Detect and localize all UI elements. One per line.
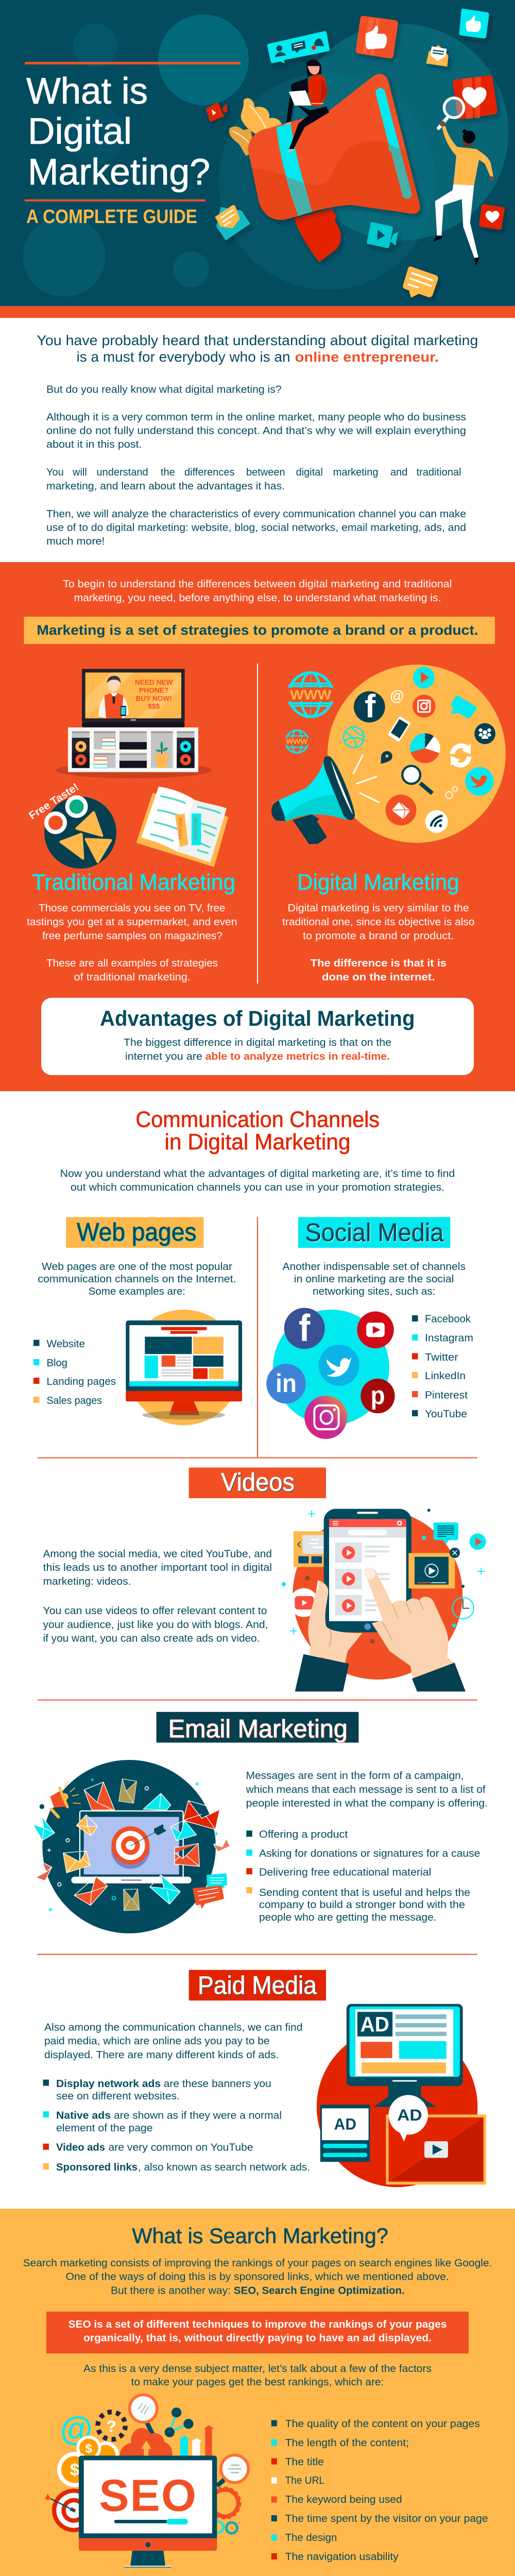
people icon (474, 723, 495, 744)
intro body text: digital (296, 467, 323, 478)
traditional marketing copy (27, 870, 237, 983)
question mark: ? (106, 2417, 116, 2435)
paid media list: Display network ads (56, 2078, 161, 2090)
illustration: digital megaphone and icons (271, 665, 506, 844)
youtube badge (289, 1588, 318, 1617)
phone (324, 1509, 411, 1632)
paid media text: Also among the communication channels, we can find (44, 2022, 302, 2033)
channels intro text (60, 1168, 455, 1193)
notification card (267, 31, 330, 63)
cloud (120, 2428, 173, 2456)
seo factors list: The navigation usability (285, 2551, 399, 2563)
seo factors list (271, 2418, 488, 2563)
gears (445, 787, 457, 799)
tv ad text: $$$ (148, 703, 160, 710)
envelope with note (215, 205, 250, 241)
videos text: Among the social media, we cited YouTube, and (43, 1549, 272, 1560)
web pages text: Web pages are one of the most popular (42, 1261, 232, 1273)
seo definition banner: organically, that is, without directly paying to have an ad displayed. (83, 2332, 432, 2344)
factors intro: to make your pages get the best rankings, which are: (131, 2377, 384, 2388)
channels intro text: out which communication channels you can use in your promotion strategies. (71, 1182, 444, 1193)
definition banner: Marketing is a set of strategies to promote a brand or a product. (37, 622, 478, 638)
social media text: in online marketing are the social (294, 1274, 454, 1285)
channels intro text: Now you understand what the advantages of digital marketing are, it’s time to find (60, 1168, 455, 1180)
www globe small: WWW (286, 738, 308, 745)
play icon (413, 667, 435, 688)
factors intro: As this is a very dense subject matter, let’s talk about a few of the factors (83, 2363, 432, 2375)
tv ad text (135, 679, 173, 710)
illustration: megaphone with people and social icons (206, 9, 508, 298)
seo factors list: The keyword being used (285, 2494, 402, 2505)
gears (210, 2487, 241, 2534)
title: A COMPLETE GUIDE (26, 206, 197, 228)
illustration: magazine with perfume samples: PERFUME (193, 817, 198, 839)
refresh icon (452, 746, 469, 765)
digital marketing copy (282, 870, 475, 983)
seo definition banner: SEO is a set of different techniques to improve the rankings of your pages (68, 2319, 447, 2330)
intro body text: use of to do digital marketing: website, blog, social networks, email marketing, ads, and (46, 522, 466, 534)
leaves (229, 98, 282, 156)
intro body text: online do not fully understand this concept. And that’s why we will explain everything (46, 426, 466, 437)
social media text: networking sites, such as: (313, 1286, 436, 1297)
social media list: Pinterest (425, 1390, 468, 1401)
email marketing list: Delivering free educational material (259, 1867, 431, 1878)
digital marketing copy: The difference is that it is (311, 958, 447, 969)
like card cyan (459, 9, 489, 39)
youtube (357, 1311, 394, 1348)
videos text: your audience, just like you do with blogs. And, (43, 1619, 268, 1631)
digital marketing copy: traditional one, since its objective is also (282, 917, 475, 928)
ad monitor (347, 2004, 463, 2107)
instagram icon (413, 694, 436, 718)
illustration: web page monitor (126, 1310, 242, 1425)
coins (57, 2436, 119, 2487)
instagram (304, 1396, 347, 1439)
intro body text (46, 384, 466, 547)
title: Digital (28, 111, 132, 152)
envelope icon (386, 794, 417, 825)
digital marketing copy: Digital Marketing (297, 870, 459, 895)
web pages heading: Web pages (77, 1218, 196, 1246)
cabinet (68, 727, 198, 772)
intro body text: will (72, 467, 87, 478)
digital marketing copy: to promote a brand or product. (303, 930, 454, 942)
intro lead text: is a must for everybody who is an (77, 349, 290, 365)
coins: $ (85, 2442, 92, 2456)
intro body text: between (246, 467, 285, 478)
title: What is (26, 71, 148, 112)
chat icon (434, 1522, 458, 1544)
title (25, 62, 241, 228)
email marketing list: Sending content that is useful and helps the (259, 1887, 470, 1899)
facebook icon: f (365, 689, 376, 725)
monitor: SEO (99, 2470, 196, 2520)
email marketing list: people who are getting the message. (259, 1912, 437, 1923)
illustration: tv commercial (56, 669, 212, 778)
intro body text: differences (184, 467, 234, 478)
email marketing list: company to build a stronger bond with the (259, 1900, 465, 1911)
at icon: @ (390, 688, 404, 704)
web pages list (33, 1338, 116, 1406)
linkedin: in (276, 1369, 297, 1398)
seo factors list: The time spent by the visitor on your page (285, 2513, 488, 2524)
paid media heading: Paid Media (198, 1972, 317, 1999)
illustration: email campaign (33, 1760, 230, 1934)
email marketing text: people interested in what the company is offering. (246, 1798, 488, 1809)
paid media list: , also known as search network ads. (138, 2162, 310, 2173)
social media list: Instagram (425, 1333, 473, 1344)
small heart card (479, 204, 505, 230)
paid media text (44, 2022, 302, 2061)
twitter (319, 1345, 359, 1386)
email marketing text: Messages are sent in the form of a campaign, (246, 1770, 464, 1782)
paid media list: Native ads (56, 2110, 111, 2122)
paid media list: are very common on YouTube (108, 2142, 253, 2153)
ad bubble: AD (397, 2107, 422, 2124)
tv ad text: PHONE? (139, 687, 168, 694)
definition intro text: To begin to understand the differences between digital marketing and traditional (63, 579, 452, 590)
paid media list: are these banners you (164, 2078, 271, 2090)
social media text (282, 1261, 466, 1297)
search marketing text: One of the ways of doing this is by sponsored links, which we mentioned above. (66, 2271, 449, 2282)
web pages list: Website (46, 1338, 85, 1350)
intro body text: marketing (333, 467, 379, 478)
video frame (408, 1548, 460, 1588)
paid media list (43, 2078, 310, 2173)
panel: advantages of digital marketing: Advantages of Digital Marketing (100, 1006, 415, 1030)
illustration: seo monitor (45, 2395, 248, 2567)
megaphone body (246, 74, 423, 223)
traditional marketing copy: of traditional marketing. (74, 972, 191, 983)
right magnifier (217, 2455, 248, 2486)
title: Marketing? (28, 152, 210, 193)
facebook (284, 1306, 325, 1349)
paid media list: see on different websites. (56, 2091, 180, 2102)
intro body text: You (46, 467, 64, 478)
envelope icon (426, 45, 449, 66)
search marketing text (23, 2258, 492, 2297)
email marketing list: Offering a product (259, 1829, 348, 1840)
social media list: YouTube (425, 1409, 467, 1420)
chat bubble icon (403, 266, 438, 298)
paid media list: element of the page (56, 2123, 153, 2134)
twitter icon (465, 767, 494, 795)
paid media text: paid media, which are online ads you pay to be (44, 2036, 270, 2047)
phone icon (388, 716, 411, 742)
video camera icon (367, 222, 398, 248)
illustration: free taste plate (27, 781, 116, 869)
intro lead text (37, 332, 478, 365)
panel: advantages of digital marketing: The biggest difference in digital marketing is that on the (124, 1037, 391, 1048)
digital marketing copy: done on the internet. (322, 972, 435, 983)
small megaphone (40, 1781, 81, 1817)
intro lead text: online entrepreneur. (295, 349, 439, 365)
paid media text: displayed. There are many different kinds of ads. (44, 2049, 279, 2061)
intro body text: and (390, 467, 407, 478)
laptop and target (71, 1811, 192, 1884)
envelopes behind laptop (84, 1779, 171, 1810)
top magnifier (130, 2395, 157, 2434)
target (45, 2488, 96, 2532)
web pages list: Blog (46, 1358, 67, 1369)
videos text: if you want, you can also create ads on video. (43, 1633, 260, 1645)
panel: search marketing (0, 2209, 515, 2576)
factors intro (83, 2363, 432, 2388)
small decorations (47, 1778, 218, 1912)
web pages list: Sales pages (46, 1395, 102, 1406)
email marketing list (246, 1829, 480, 1923)
heading: communication channels: Communication Channels (135, 1107, 380, 1132)
search marketing text: SEO, Search Engine Optimization. (234, 2285, 405, 2297)
digital marketing copy: Digital marketing is very similar to the (288, 903, 469, 914)
basketball icon (344, 727, 364, 748)
chat bubbles (193, 1873, 227, 1909)
panel: advantages of digital marketing: able to analyze metrics in real-time. (205, 1051, 390, 1062)
megaphone (271, 756, 355, 844)
location pin (381, 751, 392, 764)
envelopes (33, 1801, 230, 1910)
www globe large: WWW (290, 687, 332, 702)
tv ad text: BUY NOW! (135, 694, 172, 702)
intro body text: But do you really know what digital marketing is? (46, 384, 282, 396)
videos text: marketing: videos. (43, 1576, 131, 1587)
social media list: Twitter (425, 1352, 458, 1363)
at sign: @ (60, 2410, 93, 2447)
wifi icon (425, 810, 448, 833)
email marketing text: which means that each message is sent to a list of (246, 1784, 486, 1795)
like card (356, 16, 398, 58)
traditional marketing copy: Traditional Marketing (32, 870, 235, 895)
sound lines (353, 755, 379, 802)
email marketing list: Asking for donations or signatures for a cause (259, 1848, 480, 1859)
red camera icon (206, 102, 227, 122)
small decorations (282, 1509, 485, 1643)
intro body text: Although it is a very common term in the online market, many people who do business (46, 412, 466, 423)
seo factors list: The URL (285, 2475, 324, 2486)
www globe small (284, 730, 310, 753)
clock (453, 1598, 474, 1619)
www globe large (285, 673, 336, 717)
intro body text: marketing, and learn about the advantages it has. (46, 481, 285, 492)
megaphone handle (294, 209, 341, 262)
definition banner (24, 617, 495, 644)
social media list (412, 1314, 473, 1420)
growth arrows (179, 2425, 214, 2456)
social media list: Facebook (425, 1314, 471, 1325)
ad card: AD (334, 2115, 356, 2133)
paid media list: Sponsored links (56, 2162, 138, 2173)
illustration: magazine with perfume samples (136, 787, 228, 867)
coins: $ (70, 2461, 80, 2480)
linkedin (266, 1364, 306, 1403)
sample labels: PERFUME (178, 817, 183, 839)
panel: marketing definition (0, 562, 515, 1091)
magnifier icon (402, 766, 432, 793)
paid media list: Video ads (56, 2142, 105, 2153)
video ad (387, 2116, 485, 2183)
traditional marketing copy: Those commercials you see on TV, free (39, 903, 226, 914)
ad monitor: AD (360, 2013, 389, 2036)
intro body text: the (161, 467, 175, 478)
search marketing heading: What is Search Marketing? (132, 2224, 388, 2248)
illustration: paid ads (317, 2004, 485, 2187)
seo factors list: The length of the content; (285, 2437, 409, 2449)
hands (295, 1568, 466, 1691)
heading: communication channels (135, 1107, 380, 1155)
videos heading: Videos (221, 1468, 295, 1496)
intro body text: about it in this post. (46, 439, 142, 450)
play icon (470, 1533, 486, 1550)
social media text: Another indispensable set of channels (282, 1261, 466, 1273)
search marketing text: But there is another way: (111, 2285, 231, 2297)
social media list: LinkedIn (425, 1370, 466, 1382)
intro lead text: You have probably heard that understanding about digital marketing (37, 332, 478, 348)
seo factors list: The design (285, 2532, 337, 2544)
ad card (320, 2105, 370, 2162)
pinterest (360, 1379, 395, 1413)
intro body text: understand (97, 467, 148, 478)
question mark (98, 2412, 125, 2439)
email marketing heading: Email Marketing (168, 1715, 348, 1743)
intro body text: much more! (46, 536, 105, 547)
seo factors list: The quality of the content on your pages (285, 2418, 480, 2430)
traditional marketing copy: tastings you get at a supermarket, and even (27, 917, 237, 928)
panel: advantages of digital marketing (41, 998, 474, 1075)
definition intro text: marketing, you need, before anything else, to understand what marketing is. (74, 592, 441, 604)
traditional marketing copy: free perfume samples on magazines? (42, 930, 222, 942)
search marketing text: Search marketing consists of improving the rankings of your pages on search engines like Google. (23, 2258, 492, 2269)
heart card (453, 75, 497, 119)
facebook icon (354, 689, 385, 725)
videos heading (189, 1467, 326, 1498)
definition intro text (63, 579, 452, 604)
intro body text: traditional (417, 467, 461, 478)
heading: communication channels: in Digital Marketing (165, 1129, 350, 1155)
facebook: f (299, 1306, 311, 1349)
chat icon (451, 696, 476, 719)
tv ad text: NEED NEW (135, 679, 173, 686)
videos text: this leads us to another important tool in digital (43, 1562, 272, 1573)
panel: advantages of digital marketing: internet you are (125, 1051, 202, 1062)
decorative card left (294, 1531, 324, 1567)
web pages text: Some examples are: (89, 1286, 185, 1297)
traditional marketing copy: These are all examples of strategies (46, 958, 218, 969)
pie chart (410, 733, 440, 763)
pinterest: p (370, 1381, 385, 1410)
label: free taste: Free Taste! (27, 781, 81, 822)
web pages text: communication channels on the Internet. (38, 1274, 236, 1285)
ad bubble (389, 2095, 428, 2142)
man with magnifier (433, 98, 494, 266)
seo factors list: The title (285, 2456, 324, 2468)
videos text: You can use videos to offer relevant content to (43, 1605, 267, 1617)
presenter (99, 675, 129, 718)
seo definition banner (46, 2312, 469, 2353)
monitor (79, 2455, 217, 2567)
email marketing text (246, 1770, 488, 1809)
web pages list: Landing pages (46, 1376, 116, 1387)
woman with laptop (283, 60, 329, 152)
hero banner (0, 0, 515, 318)
videos text (43, 1549, 272, 1645)
illustration: phone with video app (282, 1509, 486, 1691)
network nodes (165, 2408, 194, 2437)
web pages text (38, 1261, 236, 1297)
intro body text: Then, we will analyze the characteristics of every communication channel you can make (46, 509, 466, 520)
social media heading: Social Media (305, 1219, 444, 1247)
illustration: social media icons (266, 1306, 395, 1439)
paid media list: are shown as if they were a normal (114, 2110, 282, 2122)
